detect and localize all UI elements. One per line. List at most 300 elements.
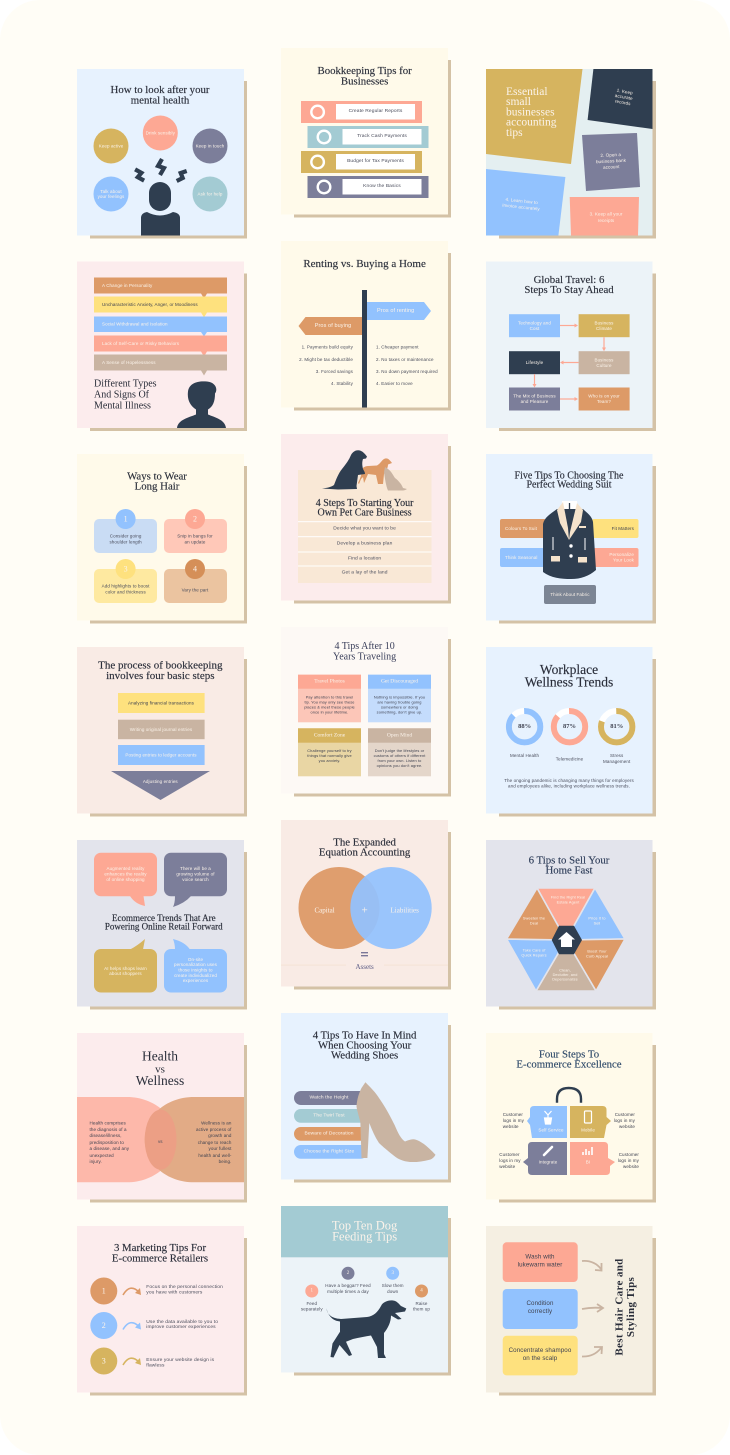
tip: open mind — [368, 728, 431, 776]
tip 2: 2 — [102, 1321, 106, 1330]
step 2: Writing original journal entries — [130, 727, 193, 732]
sign: buying: Pros of buying — [315, 323, 351, 329]
tip: photos: once in your lifetime. — [311, 710, 348, 714]
flow boxes: Climate — [596, 326, 612, 331]
hexagon of tips: Take Care of — [523, 948, 546, 952]
text: health: unexpected — [90, 1153, 114, 1158]
heading: marketing tips: E-commerce Retailers — [112, 1252, 208, 1264]
hexagon of tips: Boost Your — [587, 949, 607, 953]
steps: Get a lay of the land — [342, 570, 388, 576]
tip 2: Have a beggar? Feed — [325, 1283, 371, 1288]
bar: reports: Create Regular Reports — [349, 108, 403, 114]
paragraph: wellness: The ongoing pandemic is changing many things for employers — [504, 778, 634, 783]
tip 3: 3. Keep all your — [590, 212, 623, 216]
heading: health vs wellness: vs — [155, 1064, 165, 1076]
tip 1: 1 — [311, 1288, 314, 1294]
bubble: shoppers — [94, 939, 157, 992]
heading: ecommerce trends: Ecommerce Trends That Are — [112, 913, 216, 923]
hexagon of tips: Price It to — [588, 917, 606, 921]
heading: hair care — [614, 1258, 637, 1356]
heading: marketing tips — [112, 1242, 208, 1264]
hexagon of tips: Deal — [530, 922, 538, 926]
tip 1 — [301, 1284, 323, 1312]
tips: Fit Matters — [612, 526, 635, 531]
text: wellness: being. — [219, 1159, 232, 1164]
panel: renting vs buying — [281, 241, 451, 410]
panel: long hair — [77, 454, 247, 624]
step 4: Adjusting entries — [143, 779, 178, 784]
heading: marketing tips: 3 Marketing Tips For — [114, 1242, 206, 1254]
paragraph: wellness — [504, 778, 634, 788]
bubble: personalization: create individualized — [174, 973, 217, 978]
tip 1 — [90, 1278, 223, 1304]
text: health: Health comprises — [90, 1120, 127, 1126]
heading block: accounting tips: small — [506, 96, 531, 108]
hexagon of tips: Find the Right Real — [551, 895, 585, 899]
panel: bookkeeping tips — [281, 48, 451, 218]
heading: global travel — [524, 274, 614, 296]
list: renting: 2. No taxes or maintenance — [376, 357, 434, 362]
bubble: voice search: voice search — [182, 877, 209, 882]
tip: open mind: Open Mind — [387, 732, 412, 738]
flow boxes: Business — [594, 358, 614, 362]
heading: wedding shoes — [313, 1030, 417, 1062]
tip: discouraged — [368, 675, 431, 722]
heading: travel tips — [333, 641, 396, 662]
tip 3: receipts — [598, 218, 615, 223]
tip 1 — [94, 509, 157, 553]
tip 3 — [90, 1348, 215, 1374]
tip 1: separately — [301, 1306, 323, 1312]
panel: wellness trends — [486, 647, 656, 816]
venn: health and wellness: vs — [158, 1139, 163, 1144]
tip 1: shoulder length — [109, 540, 142, 544]
quadrant: integrate — [523, 1142, 567, 1175]
heading: hair care: Best Hair Care and — [614, 1258, 626, 1356]
list of signs: A Change in Personality — [102, 283, 153, 288]
heading: ecommerce trends: Powering Online Retail Forward — [105, 922, 223, 932]
icon: house — [552, 926, 582, 954]
tip: shampoo: on the scalp — [523, 1355, 558, 1362]
list: renting: 1. Cheaper payment — [376, 344, 419, 350]
tip 2: 2. Open a — [600, 152, 622, 158]
tip 3: color and thickness — [105, 590, 146, 594]
tip 2: business bank — [596, 158, 627, 164]
list: buying — [299, 344, 354, 386]
tip 1: 1. Keep — [616, 88, 634, 96]
labels: website — [499, 1164, 516, 1169]
heading: wedding shoes: 4 Tips To Have In Mind — [313, 1030, 417, 1042]
heading: wedding suit: Perfect Wedding Suit — [526, 480, 612, 491]
donut: telemedicine: 87% — [563, 723, 576, 730]
quadrant: mobile: Mobile — [581, 1128, 595, 1132]
tip 4: 4 — [420, 1288, 423, 1294]
labels: website — [503, 1124, 519, 1129]
icon: dog — [326, 1300, 406, 1358]
tip: open mind: Don't judge the lifestyles or — [375, 748, 425, 753]
tip: shampoo — [503, 1336, 578, 1375]
hexagon of tips: Curb Appeal — [586, 954, 608, 958]
tip 4: them up — [413, 1306, 430, 1312]
panel: health vs wellness — [77, 1033, 247, 1202]
pills: Choose the Right Size — [304, 1148, 355, 1154]
step 4 — [111, 771, 210, 800]
circles of advice — [94, 116, 228, 212]
labels: logs in my — [499, 1158, 521, 1163]
tip: discouraged: something, don't give up. — [377, 710, 422, 714]
heading: bookkeeping process — [98, 660, 223, 682]
heading: ecommerce trends — [105, 913, 223, 932]
tip: shampoo: Concentrate shampoo — [509, 1347, 572, 1354]
panel: bookkeeping process — [77, 647, 247, 816]
venn: health and wellness — [77, 1097, 244, 1182]
tip 4: invoice accurately — [502, 203, 541, 212]
heading: mental illness — [94, 378, 157, 412]
quadrant: self service: Self Service — [538, 1128, 564, 1132]
icon: pets — [322, 450, 407, 490]
heading: ecommerce excellence: E-commerce Excellence — [516, 1058, 622, 1070]
donut: mental health: Mental Health — [510, 753, 540, 758]
flow boxes: Lifestyle — [526, 360, 544, 365]
panel: wedding suit — [486, 454, 656, 624]
panel: marketing tips — [77, 1226, 247, 1396]
heading: sell your home: 6 Tips to Sell Your — [529, 854, 610, 866]
panel: ecommerce trends — [77, 840, 247, 1010]
tip: condition — [503, 1289, 578, 1329]
pills: Beware of Decoration — [304, 1130, 354, 1136]
heading: mental illness: And Signs Of — [94, 390, 150, 400]
heading: wellness trends: Workplace — [540, 662, 598, 677]
tip 3: 3 — [124, 564, 128, 574]
donut: stress: Stress — [610, 753, 624, 758]
heading: wedding shoes: When Choosing Your — [318, 1040, 412, 1052]
panel: wedding shoes — [281, 1013, 451, 1182]
flow boxes: Culture — [596, 363, 612, 368]
heading: pet care: Own Pet Care Business — [318, 508, 412, 518]
bubble: augmented reality: Augmented reality — [107, 866, 145, 871]
tip 2: Use the data available to you to — [146, 1319, 218, 1325]
tip 2: 2 — [193, 514, 197, 524]
heading: dog feeding: Top Ten Dog — [332, 1218, 398, 1232]
icon: suit — [543, 501, 596, 579]
text: health: a disease, and any — [90, 1146, 130, 1151]
quadrant: mobile — [570, 1106, 611, 1138]
step 3 — [118, 745, 205, 765]
heading: wedding suit — [515, 471, 624, 491]
tip: photos: places & meet these people — [304, 704, 355, 709]
text: health — [90, 1120, 130, 1164]
heading: mental illness: Mental Illness — [94, 400, 151, 412]
list of signs — [94, 278, 227, 376]
bar: reports — [301, 101, 422, 123]
tip 4 — [486, 169, 565, 236]
bubble: personalization — [164, 939, 227, 992]
tip 2 — [90, 1312, 218, 1339]
tip 3 — [570, 197, 639, 236]
hexagon of tips: Depersonalize — [552, 978, 578, 982]
text: wellness — [196, 1120, 232, 1164]
bubble: voice search: There will be a — [180, 866, 211, 871]
tip 4: Raise — [415, 1301, 428, 1306]
labels: Customer — [619, 1152, 639, 1157]
bubble: voice search: growing volume of — [176, 872, 215, 876]
labels: website — [619, 1124, 635, 1129]
step 2 — [118, 720, 205, 739]
flow boxes: Who is on your — [588, 394, 620, 398]
hexagon of tips: Sweeten the — [523, 917, 545, 921]
flow arrows — [532, 324, 606, 401]
list: renting: 3. No down payment required — [376, 369, 438, 374]
tip 3: flawless — [146, 1362, 165, 1368]
tip 2: 2 — [347, 1271, 350, 1276]
panel: ecommerce excellence — [486, 1033, 656, 1202]
tip: comfort — [298, 728, 361, 776]
bar: basics: Know the Basics — [363, 183, 401, 189]
flow boxes: Technology and — [518, 320, 551, 326]
panel: hair care — [486, 1226, 656, 1396]
circles of advice: Keep in touch — [196, 144, 225, 148]
tips — [500, 519, 638, 604]
tip: open mind: customs of others if different — [374, 753, 426, 758]
heading: bookkeeping tips: Bookkeeping Tips for — [318, 65, 412, 77]
venn: capital and liabilities — [298, 867, 432, 949]
tip: wash: lukewarm water — [518, 1262, 562, 1268]
tip 1: you have with customers — [146, 1289, 203, 1295]
heading block: accounting tips: businesses — [506, 106, 555, 118]
tip 4 — [164, 559, 227, 603]
tip 2: Snip in bangs for — [177, 534, 213, 538]
heading: equation: Equation Accounting — [319, 846, 411, 858]
tip 1: 1 — [102, 1286, 106, 1296]
tip 1: Focus on the personal connection — [146, 1284, 223, 1290]
tip: open mind: from your own. Listen to — [378, 758, 421, 763]
panel: pet care — [281, 434, 451, 604]
list of signs: A Sense of Hopelessness — [102, 360, 156, 365]
text: health: predisposition to — [90, 1140, 124, 1145]
labels: logs in my — [503, 1118, 525, 1123]
steps: Develop a business plan — [337, 540, 393, 546]
sign: renting: Pros of renting — [377, 308, 414, 314]
signpost pole — [362, 290, 367, 408]
venn: capital and liabilities: Capital — [314, 906, 335, 914]
heading: health vs wellness: Health — [142, 1048, 178, 1063]
tip 3: 3 — [391, 1271, 394, 1276]
heading: travel tips: Years Traveling — [333, 651, 396, 662]
tip 4 — [413, 1284, 430, 1312]
venn: capital and liabilities: + — [361, 904, 368, 916]
quadrant: insights — [570, 1142, 615, 1175]
tip: discouraged: somewhere or doing — [381, 704, 418, 709]
text: health: injury. — [90, 1159, 102, 1164]
heading: mental illness: Different Types — [94, 378, 157, 390]
heading: bookkeeping tips — [318, 65, 412, 87]
heading: dog feeding — [281, 1206, 448, 1257]
tip 3 — [94, 559, 157, 603]
heading: wellness trends — [525, 662, 613, 690]
sign: renting — [367, 302, 431, 320]
equals assets: Assets — [355, 963, 374, 971]
tip: open mind: opinions you don't agree. — [377, 763, 422, 768]
heading: health vs wellness — [136, 1048, 184, 1088]
circles of advice: Ask for help — [198, 192, 223, 196]
tip: photos: Pay attention to this travel — [306, 694, 353, 700]
hexagon of tips — [507, 888, 625, 991]
tip: photos: Travel Photos — [314, 679, 345, 685]
tip: condition: correctly — [528, 1308, 553, 1315]
list: renting: 4. Easier to move — [376, 381, 413, 386]
tip 2 — [164, 509, 227, 553]
bar: tax — [301, 151, 422, 173]
text: wellness: your fullest — [209, 1146, 232, 1151]
list: buying: 1. Payments build equity — [302, 344, 354, 350]
hexagon of tips: Quick Repairs — [521, 953, 547, 957]
heading: sell your home — [529, 854, 610, 876]
donut: telemedicine: Telemedicine — [556, 756, 584, 762]
tip: wash: Wash with — [525, 1254, 555, 1260]
quadrant: integrate: Integrate — [539, 1160, 558, 1164]
text: wellness: growth and — [208, 1133, 232, 1138]
heading: pet care: 4 Steps To Starting Your — [316, 498, 414, 509]
heading: health vs wellness: Wellness — [136, 1073, 184, 1088]
tip: photos — [298, 675, 361, 722]
tips: Think About Fabric — [550, 592, 590, 597]
heading block: accounting tips: tips — [506, 127, 523, 139]
circles of advice: Drink sensibly — [146, 130, 176, 136]
list: buying: 3. Forced savings — [316, 369, 354, 374]
flow boxes: The Mix of Business — [513, 394, 556, 398]
heading: pet care — [316, 498, 414, 518]
bubble: voice search — [164, 853, 227, 907]
list: buying: 4. Stability — [331, 381, 354, 386]
bubble: personalization: personalization uses — [174, 962, 218, 967]
flow boxes — [509, 314, 630, 410]
tip 1: Feed — [306, 1301, 318, 1306]
panel: signs of mental illness — [77, 262, 247, 431]
list: renting — [376, 344, 438, 386]
tip: comfort: Comfort Zone — [314, 732, 346, 738]
text: health: disease/illness, — [90, 1133, 122, 1138]
heading block: accounting tips — [486, 69, 582, 164]
steps — [298, 521, 432, 576]
heading: renting vs buying: Renting vs. Buying a Home — [303, 258, 426, 270]
text: health: the diagnosis of a — [90, 1127, 127, 1132]
panel: accounting tips — [486, 69, 656, 238]
tip: discouraged: are having trouble going — [377, 699, 422, 704]
heading: global travel: Steps To Stay Ahead — [524, 284, 614, 296]
list of signs: Uncharacteristic Anxiety, Anger, or Moodiness — [102, 302, 198, 307]
tips: Colours To Suit — [505, 526, 538, 531]
hexagon of tips: Sell — [594, 922, 600, 926]
text: wellness: active process of — [196, 1127, 232, 1132]
circles of advice: Talk about — [100, 189, 122, 194]
arrows — [582, 1261, 603, 1357]
tip 3 — [382, 1267, 404, 1294]
heading: equation: The Expanded — [333, 836, 397, 848]
circles of advice: Keep active — [99, 144, 124, 148]
tip 1 — [588, 69, 652, 129]
tip: comfort: things that normally give — [307, 753, 352, 758]
bubble: personalization: experiences — [183, 978, 209, 983]
donut: stress: 81% — [610, 723, 623, 730]
tip 2: account — [603, 164, 620, 170]
heading: ecommerce excellence — [516, 1048, 622, 1070]
icon: bag handle — [557, 1088, 581, 1103]
heading block: accounting tips: Essential — [506, 86, 548, 98]
labels — [499, 1112, 640, 1169]
labels: website — [623, 1164, 639, 1169]
tip 3: Slow them — [382, 1283, 404, 1288]
bubble: shoppers: about shoppers — [109, 971, 142, 976]
flow boxes: Team? — [597, 399, 611, 404]
pills — [294, 1091, 368, 1159]
heading: sell your home: Home Fast — [545, 864, 593, 876]
bar: basics — [308, 176, 428, 198]
step 1: Analyzing financial transactions — [128, 700, 195, 706]
tips: Personalize — [609, 552, 634, 557]
donut: mental health — [509, 711, 540, 758]
heading: global travel: Global Travel: 6 — [534, 274, 605, 286]
step 3: Posting entries to ledger accounts — [125, 752, 197, 758]
bubble: augmented reality: enhances the reality — [104, 872, 147, 876]
donut: mental health: 88% — [518, 723, 531, 730]
tip: discouraged: Get Discouraged — [381, 679, 418, 685]
tip: photos: tip. You may only see these — [304, 699, 355, 704]
circles of advice: your feelings — [98, 194, 125, 199]
tip: wash — [503, 1242, 578, 1282]
tip: discouraged: Nothing is impossible. If you — [374, 694, 425, 700]
hexagon of tips: Estate Agent — [557, 900, 580, 904]
tip 3: Add highlights to boost — [102, 584, 150, 588]
icon: shoe — [356, 1082, 436, 1162]
steps: Find a location — [348, 556, 381, 562]
panel: global travel — [486, 262, 656, 431]
labels: Customer — [615, 1112, 635, 1117]
flow boxes: Business — [594, 320, 614, 326]
tip 2: multiple times a day — [327, 1289, 370, 1294]
heading: mental health: How to look after your — [111, 84, 210, 96]
bubble: personalization: those insights to — [178, 968, 213, 972]
icon: stress bolts — [135, 159, 187, 181]
panel: dog feeding — [281, 1206, 451, 1376]
tip: comfort: Challenge yourself to try — [307, 748, 352, 753]
panel: expanded equation — [281, 820, 451, 990]
venn: capital and liabilities: Liabilities — [391, 906, 419, 914]
panel: sell your home — [486, 840, 656, 1010]
heading: equation — [319, 836, 411, 858]
bar: cash — [308, 126, 428, 148]
icon: silhouette — [177, 381, 226, 428]
heading: hair care: Styling Tips — [625, 1276, 637, 1337]
tip 1: 1 — [124, 514, 128, 524]
labels: logs in my — [618, 1158, 640, 1163]
text: wellness: Wellness is an — [201, 1120, 232, 1126]
bubble: personalization: On-site — [188, 957, 203, 962]
heading: dog feeding: Feeding Tips — [332, 1230, 397, 1244]
tip 2 — [582, 133, 640, 191]
tips: Your Look — [613, 558, 635, 562]
pills: Watch the Height — [310, 1094, 349, 1100]
text: wellness: change to reach — [198, 1140, 232, 1145]
tip 2: improve customer experiences — [146, 1324, 216, 1330]
heading: long hair: Ways to Wear — [127, 470, 187, 482]
tip 3: 3 — [102, 1356, 106, 1366]
tip 1: Consider going — [110, 534, 142, 538]
steps: Decide what you want to be — [333, 526, 396, 532]
icon: person — [141, 182, 180, 236]
heading: mental health — [111, 84, 210, 106]
flow boxes: Cost — [530, 326, 540, 331]
labels: logs in my — [614, 1118, 636, 1123]
